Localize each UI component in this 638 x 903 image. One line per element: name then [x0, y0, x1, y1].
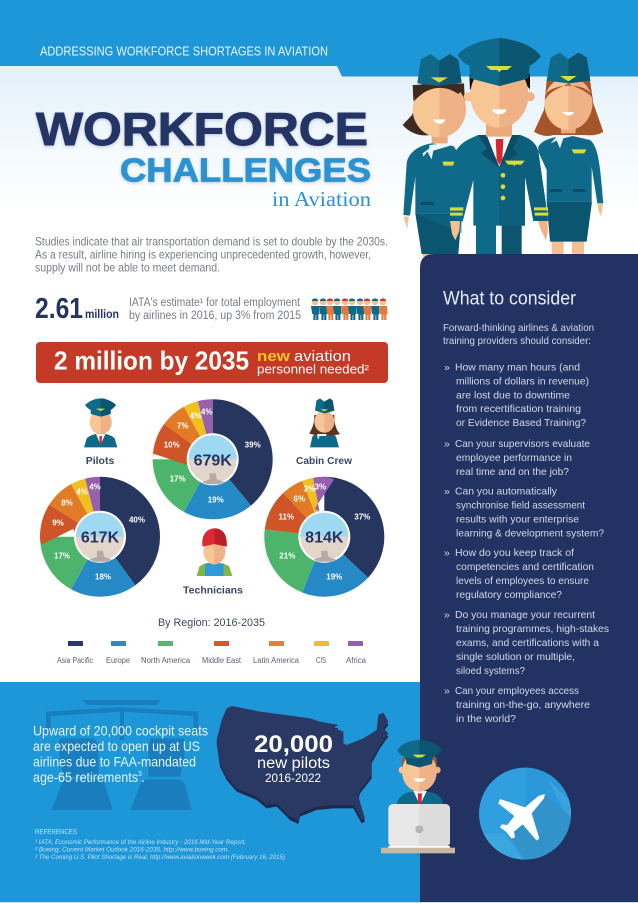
legend: North America [141, 656, 191, 665]
top banner [0, 0, 638, 76]
legend heading: By Region: 2016-2035 [158, 617, 265, 629]
banner heading: ADDRESSING WORKFORCE SHORTAGES IN AVIATION [40, 44, 328, 58]
map stat [254, 731, 333, 785]
donut: pilots: 4% [89, 483, 101, 492]
question 5: Do you manage your recurrent [455, 609, 595, 621]
donut: technicians: 39% [245, 440, 261, 449]
question 2: Can your supervisors evaluate [455, 438, 590, 450]
cockpit text: airlines due to FAA-mandated [33, 754, 196, 770]
label: Technicians: Technicians [183, 584, 243, 596]
banner: 2 million by 2035: personnel needed² [257, 362, 370, 376]
panel intro: training providers should consider: [443, 335, 591, 347]
right flight attendant [534, 53, 603, 257]
question 4: » [444, 547, 450, 559]
banner: 2 million by 2035: new [257, 348, 290, 365]
donut: pilots [52, 483, 145, 582]
question 5: siloed systems? [456, 665, 525, 677]
question 1: or Evidence Based Training? [456, 417, 586, 429]
question 5 [444, 609, 609, 677]
question 6: » [444, 685, 450, 697]
title line 1: WORKFORCE [36, 103, 368, 155]
donut: pilots: 617K [81, 530, 120, 547]
bottom blue panel [0, 682, 422, 903]
question 5: » [444, 609, 450, 621]
donut: technicians: 4% [201, 407, 212, 416]
question 4: regulatory compliance? [456, 589, 562, 601]
cockpit text: Upward of 20,000 cockpit seats [33, 722, 208, 738]
question 2: employee performance in [456, 452, 572, 464]
references: REFERENCES [35, 827, 77, 836]
donut: pilots: 18% [95, 573, 111, 582]
legend: Africa [346, 656, 367, 665]
icon: pilot at laptop [381, 740, 455, 853]
label: Pilots: Pilots [86, 455, 114, 467]
question 2: real time and on the job? [456, 466, 569, 478]
question 6: training on-the-go, anywhere [456, 699, 590, 711]
panel: what to consider [420, 254, 638, 903]
question list [444, 362, 609, 725]
subtitle: in Aviation [272, 187, 372, 211]
map stat: 20,000 [254, 731, 333, 758]
bottom edge strip [0, 902, 638, 903]
cockpit text: . [141, 769, 145, 785]
donut: pilots: 4% [76, 488, 88, 497]
cockpit text: 3 [138, 771, 142, 778]
panel intro: Forward-thinking airlines & aviation [443, 322, 594, 334]
donut: cabin crew [279, 483, 370, 582]
question 6 [444, 685, 590, 725]
donut: pilots: 9% [52, 519, 64, 528]
question 4: How do you keep track of [455, 547, 574, 559]
donut: cabin crew: 19% [326, 573, 342, 582]
question 3 [444, 486, 604, 540]
question 2 [444, 438, 590, 478]
title [36, 103, 371, 188]
question 1: » [444, 362, 450, 374]
US map [217, 706, 388, 824]
left flight attendant [403, 54, 468, 257]
icon: plane badge [479, 768, 571, 860]
question 4: competencies and certification [456, 561, 594, 573]
question 5: exams, and certifications with a [456, 637, 599, 649]
donut: technicians: 4% [190, 411, 201, 420]
stat: 2.61 million: 2.61 [35, 293, 83, 325]
banner: 2 million by 2035: 2 million by 2035 [54, 346, 249, 376]
cockpit text [33, 722, 208, 785]
donut: cabin crew: 21% [279, 552, 295, 561]
references: ³ The Coming U.S. Pilot Shortage is Real, http://www.aviationweek.com (February 16, 2015) [35, 855, 285, 861]
donut: pilots: 40% [129, 516, 145, 525]
central pilot [450, 38, 548, 255]
stat description: by airlines in 2016, up 3% from 2015 [129, 310, 301, 322]
question 5: training programmes, high-stakes [456, 623, 609, 635]
references: ² Boeing, Current Market Outlook 2016-2035, http://www.boeing.com. [35, 848, 229, 854]
icon: cabin crew [309, 398, 340, 447]
question 1: are lost due to downtime [456, 390, 570, 402]
intro paragraph: supply will not be able to meet demand. [35, 260, 220, 274]
stat: 2.61 million [35, 293, 301, 325]
icon: technician [197, 528, 232, 576]
legend: Latin America [253, 656, 300, 665]
donut: cabin crew: 11% [279, 513, 294, 522]
question 1: from recertification training [456, 403, 581, 415]
intro paragraph: As a result, airline hiring is experiencing unprecedented growth, however, [35, 248, 371, 262]
banner: 2 million by 2035: aviation [294, 348, 351, 365]
page background gradient [0, 60, 638, 210]
stat description [129, 297, 301, 322]
donut: cabin crew: 6% [294, 495, 305, 504]
donut: technicians: 17% [170, 474, 186, 483]
title line 2: CHALLENGES [120, 152, 371, 188]
cockpit silhouette [46, 700, 198, 810]
donut: technicians: 10% [164, 440, 180, 449]
panel intro [443, 322, 594, 347]
donut: technicians [164, 407, 261, 504]
stat description: IATA's estimate¹ for total employment [129, 297, 301, 309]
donut: cabin crew: 3% [315, 483, 326, 492]
question 5: single solution or multiple, [456, 651, 575, 663]
intro paragraph: Studies indicate that air transportation demand is set to double by the 2030s. [35, 234, 388, 248]
donut: cabin crew: 37% [354, 513, 370, 522]
question 2: » [444, 438, 450, 450]
stat: 2.61 million: million [85, 309, 119, 321]
question 1: millions of dollars in revenue) [456, 376, 589, 388]
panel heading: What to consider [443, 288, 577, 310]
cockpit text: are expected to open up at US [33, 738, 200, 754]
map stat: new pilots [257, 755, 330, 772]
donut: pilots: 17% [54, 552, 70, 561]
banner: 2 million by 2035 [36, 342, 388, 383]
question 4 [444, 547, 594, 601]
icon: pilot [84, 398, 117, 447]
legend: Europe [106, 656, 131, 665]
legend: CIS [316, 656, 326, 665]
question 3: results with your enterprise [456, 514, 579, 526]
donut: technicians: 679K [194, 452, 232, 469]
icon: row of staff [311, 298, 388, 320]
question 1 [444, 362, 589, 429]
intro paragraph [35, 234, 388, 274]
donut: technicians: 7% [177, 421, 188, 430]
illustration: crew of three [403, 38, 603, 257]
question 6: Can your employees access [455, 685, 579, 697]
question 4: levels of employees to ensure [456, 575, 589, 587]
question 3: learning & development system? [456, 528, 604, 540]
legend: Asia Pacific [57, 656, 93, 665]
question 1: How many man hours (and [455, 362, 580, 374]
references: ¹ IATA, Economic Performance of the Airline Industry - 2016 Mid-Year Report. [35, 840, 246, 846]
references [35, 827, 285, 861]
donut: cabin crew: 3% [304, 485, 315, 494]
label: Cabin Crew: Cabin Crew [296, 455, 353, 467]
legend [57, 641, 367, 665]
donut: cabin crew: 814K [305, 530, 344, 547]
question 3: synchronise field assessment [456, 500, 585, 512]
question 6: in the world? [456, 713, 516, 725]
cockpit text: age-65 retirements [33, 769, 138, 785]
question 3: » [444, 486, 450, 498]
legend: Middle East [202, 656, 242, 665]
donut: pilots: 8% [61, 499, 73, 508]
map stat: 2016-2022 [265, 771, 321, 785]
donut: technicians: 19% [208, 495, 224, 504]
question 3: Can you automatically [455, 486, 558, 498]
